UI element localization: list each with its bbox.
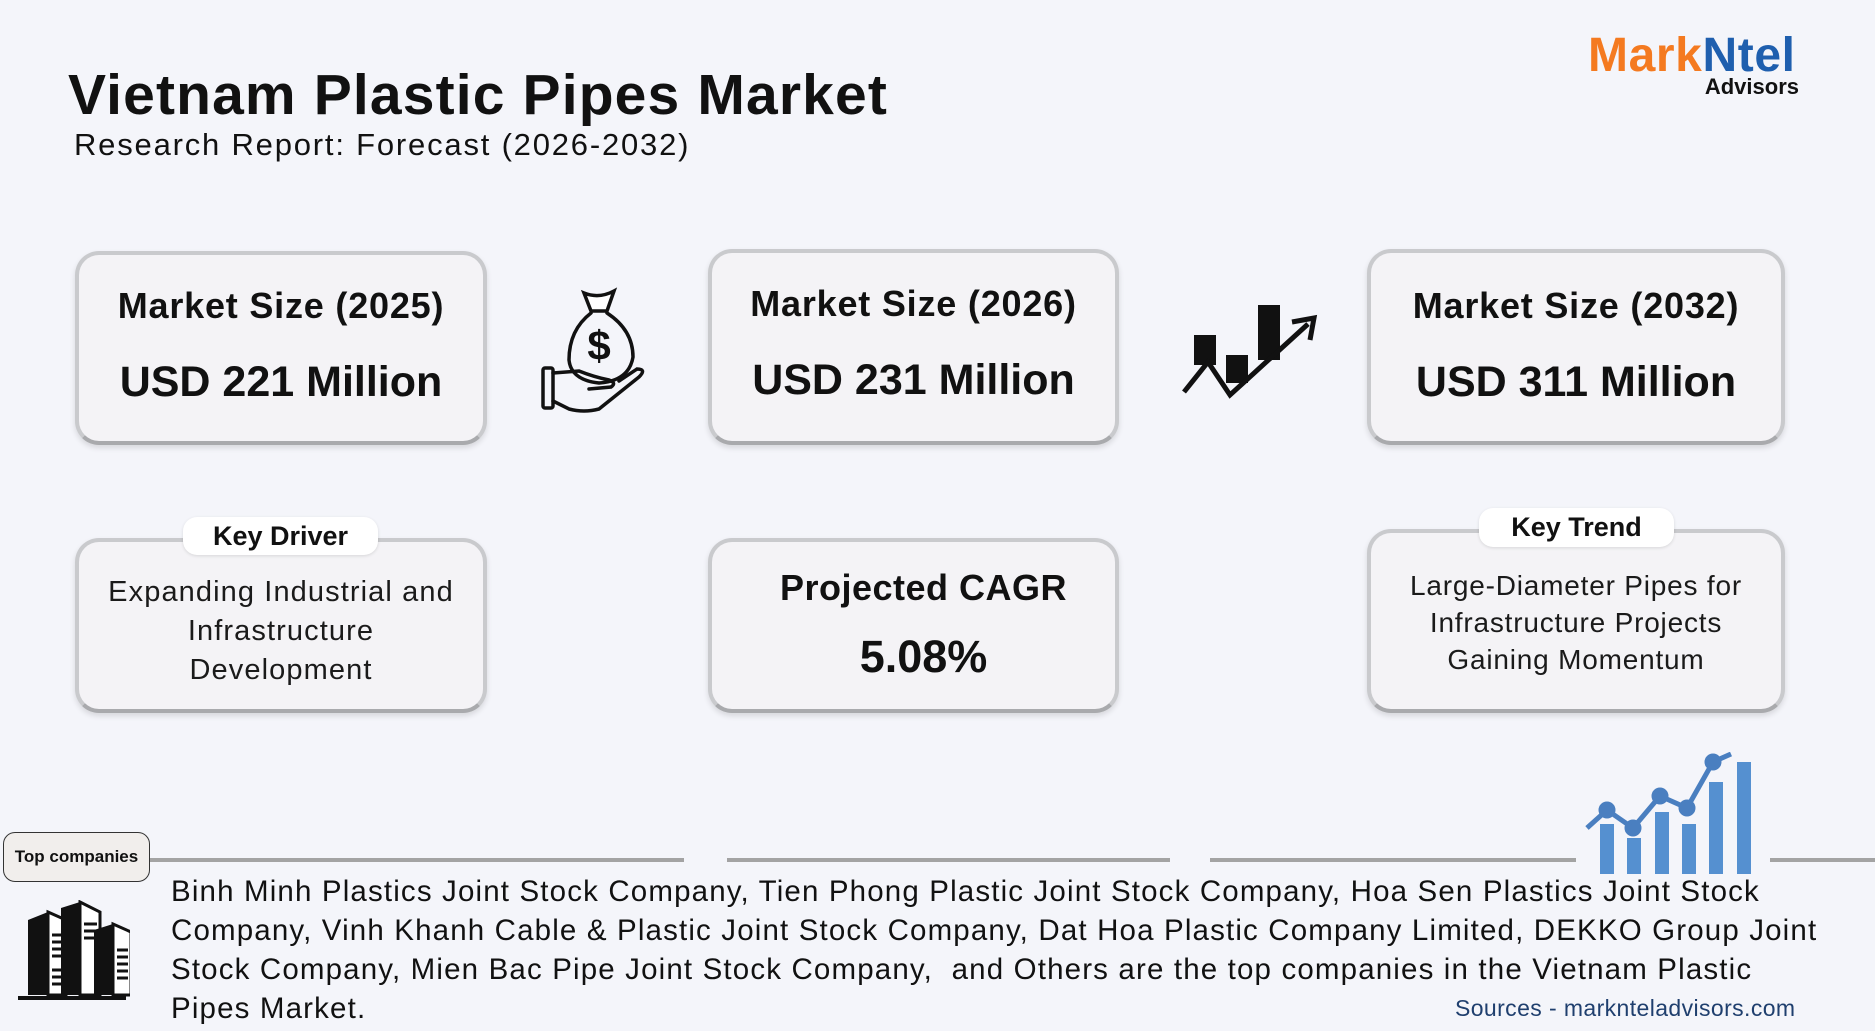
logo: Advisors xyxy=(1705,74,1799,99)
label: key driver xyxy=(183,517,378,555)
icon: money bag in hand xyxy=(541,287,644,413)
card: market size 2025 xyxy=(75,251,487,445)
panel: key trend: Infrastructure Projects xyxy=(1430,607,1722,638)
panel: projected CAGR: 5.08% xyxy=(860,631,987,682)
icon: bar chart xyxy=(1585,752,1751,874)
label: top companies: Top companies xyxy=(15,847,138,866)
card: market size 2025: Market Size (2025) xyxy=(118,285,444,326)
label: key driver: Key Driver xyxy=(213,521,348,551)
card: market size 2026: USD 231 Million xyxy=(752,356,1075,404)
panel: key driver: Development xyxy=(190,654,372,686)
text: companies list: Stock Company, Mien Bac Pipe Joint Stock Company, and Others are the top companies in the Vietnam Plastic xyxy=(171,953,1752,986)
card: market size 2032 xyxy=(1367,249,1785,445)
card: market size 2026: Market Size (2026) xyxy=(750,283,1077,324)
label: key trend: Key Trend xyxy=(1511,512,1642,542)
label: key trend xyxy=(1479,508,1674,547)
text: companies list: Binh Minh Plastics Joint Stock Company, Tien Phong Plastic Joint Stock Company, Hoa Sen Plastics Joint Stock xyxy=(171,875,1760,908)
panel: projected CAGR xyxy=(708,538,1119,713)
card: market size 2026 xyxy=(708,249,1119,445)
icon: buildings xyxy=(18,900,130,1000)
text: companies list: Company, Vinh Khanh Cable & Plastic Joint Stock Company, Dat Hoa Plastic Company Limited, DEKKO Group Joint xyxy=(171,914,1817,947)
title: Vietnam Plastic Pipes Market xyxy=(68,63,888,127)
icon: growth chart arrow xyxy=(1182,305,1318,399)
card: market size 2032: Market Size (2032) xyxy=(1413,285,1739,326)
icon: money bag in hand: $ xyxy=(587,322,611,369)
panel: key trend: Gaining Momentum xyxy=(1447,644,1705,675)
subtitle: Research Report: Forecast (2026-2032) xyxy=(74,127,690,162)
panel: key driver: Infrastructure xyxy=(188,615,374,647)
source: Sources - marknteladvisors.com xyxy=(1455,995,1796,1021)
panel: projected CAGR: Projected CAGR xyxy=(780,567,1067,608)
text: companies list xyxy=(171,875,1817,1025)
panel: key trend: Large-Diameter Pipes for xyxy=(1410,570,1742,601)
card: market size 2032: USD 311 Million xyxy=(1416,358,1736,406)
label: top companies xyxy=(3,832,150,882)
panel: key trend xyxy=(1367,529,1785,713)
card: market size 2025: USD 221 Million xyxy=(120,358,442,406)
panel: key driver: Expanding Industrial and xyxy=(108,576,454,608)
logo: MarkNtel xyxy=(1588,29,1796,82)
text: companies list: Pipes Market. xyxy=(171,992,366,1025)
panel: key driver xyxy=(75,538,487,713)
